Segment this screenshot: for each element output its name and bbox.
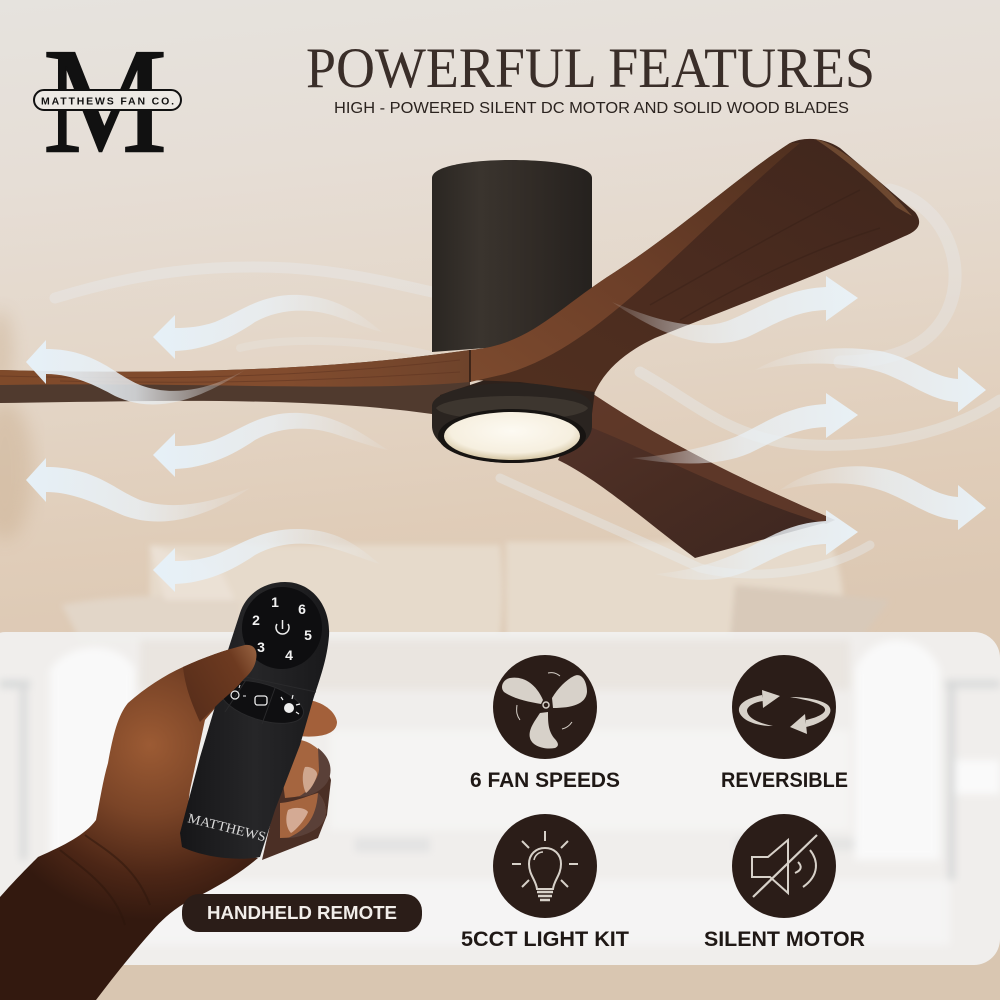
remote icons [227, 620, 289, 705]
blade: lower right [558, 392, 835, 558]
icon: muted speaker [732, 814, 836, 918]
blade: upper right [470, 139, 919, 392]
label: 6 FAN SPEEDS [470, 768, 620, 792]
arrow: left middle [153, 413, 388, 477]
air flow arrows: left [26, 295, 388, 592]
remote brand: MATTHEWS [186, 810, 268, 844]
remote dial [235, 581, 329, 675]
motor housing [432, 160, 592, 352]
frosted panel [0, 632, 1000, 965]
hand holding remote [0, 581, 337, 1000]
label: REVERSIBLE [721, 768, 848, 792]
hand: fingers [262, 700, 337, 860]
arrow: left upper [153, 295, 382, 359]
feature: reversible [721, 655, 848, 792]
arrow: left lower [153, 529, 380, 592]
remote body: 4 [285, 647, 293, 663]
feature: 5CCT light kit [461, 814, 629, 951]
arrow: far left upper [26, 340, 245, 404]
ceiling fan [0, 139, 919, 558]
air flow: thin swooshes behind the fan [55, 190, 1000, 574]
arrow: right lower [655, 510, 858, 580]
feature: silent motor [704, 814, 865, 951]
arrow: far right lower [780, 466, 986, 530]
remote body: 2 [252, 612, 260, 628]
light kit: underside [440, 375, 595, 430]
remote body: 3 [257, 639, 265, 655]
remote buttons [216, 672, 308, 732]
remote body [180, 581, 329, 859]
hub seam [469, 350, 471, 382]
remote body: 6 [298, 601, 306, 617]
remote body: 1 [271, 594, 279, 610]
remote body: 5 [304, 627, 312, 643]
title: POWERFUL FEATURES [306, 37, 875, 100]
arrow: far left lower [26, 458, 250, 522]
icon: bulb [493, 814, 597, 918]
label pill: handheld remote [182, 894, 422, 932]
label: 5CCT LIGHT KIT [461, 927, 629, 951]
icon: fan [493, 655, 597, 759]
blade: left [0, 350, 470, 414]
arrow: far right upper [755, 348, 986, 412]
icon: rotation arrows [732, 655, 836, 759]
logo: M [43, 16, 167, 184]
light kit [432, 383, 592, 463]
hand: palm and wrist [0, 645, 258, 1000]
label pill: handheld remote: HANDHELD REMOTE [207, 903, 397, 923]
subtitle: HIGH - POWERED SILENT DC MOTOR AND SOLID WOOD BLADES [334, 100, 849, 117]
feature: 6 fan speeds [470, 655, 620, 792]
arrow: right upper [612, 276, 858, 343]
sofa cushions [62, 542, 890, 640]
arrow: right middle [632, 393, 858, 463]
label: SILENT MOTOR [704, 927, 865, 951]
thumb [183, 645, 257, 722]
logo: MATTHEWS FAN CO. [41, 96, 174, 108]
air flow arrows: right [612, 276, 986, 580]
